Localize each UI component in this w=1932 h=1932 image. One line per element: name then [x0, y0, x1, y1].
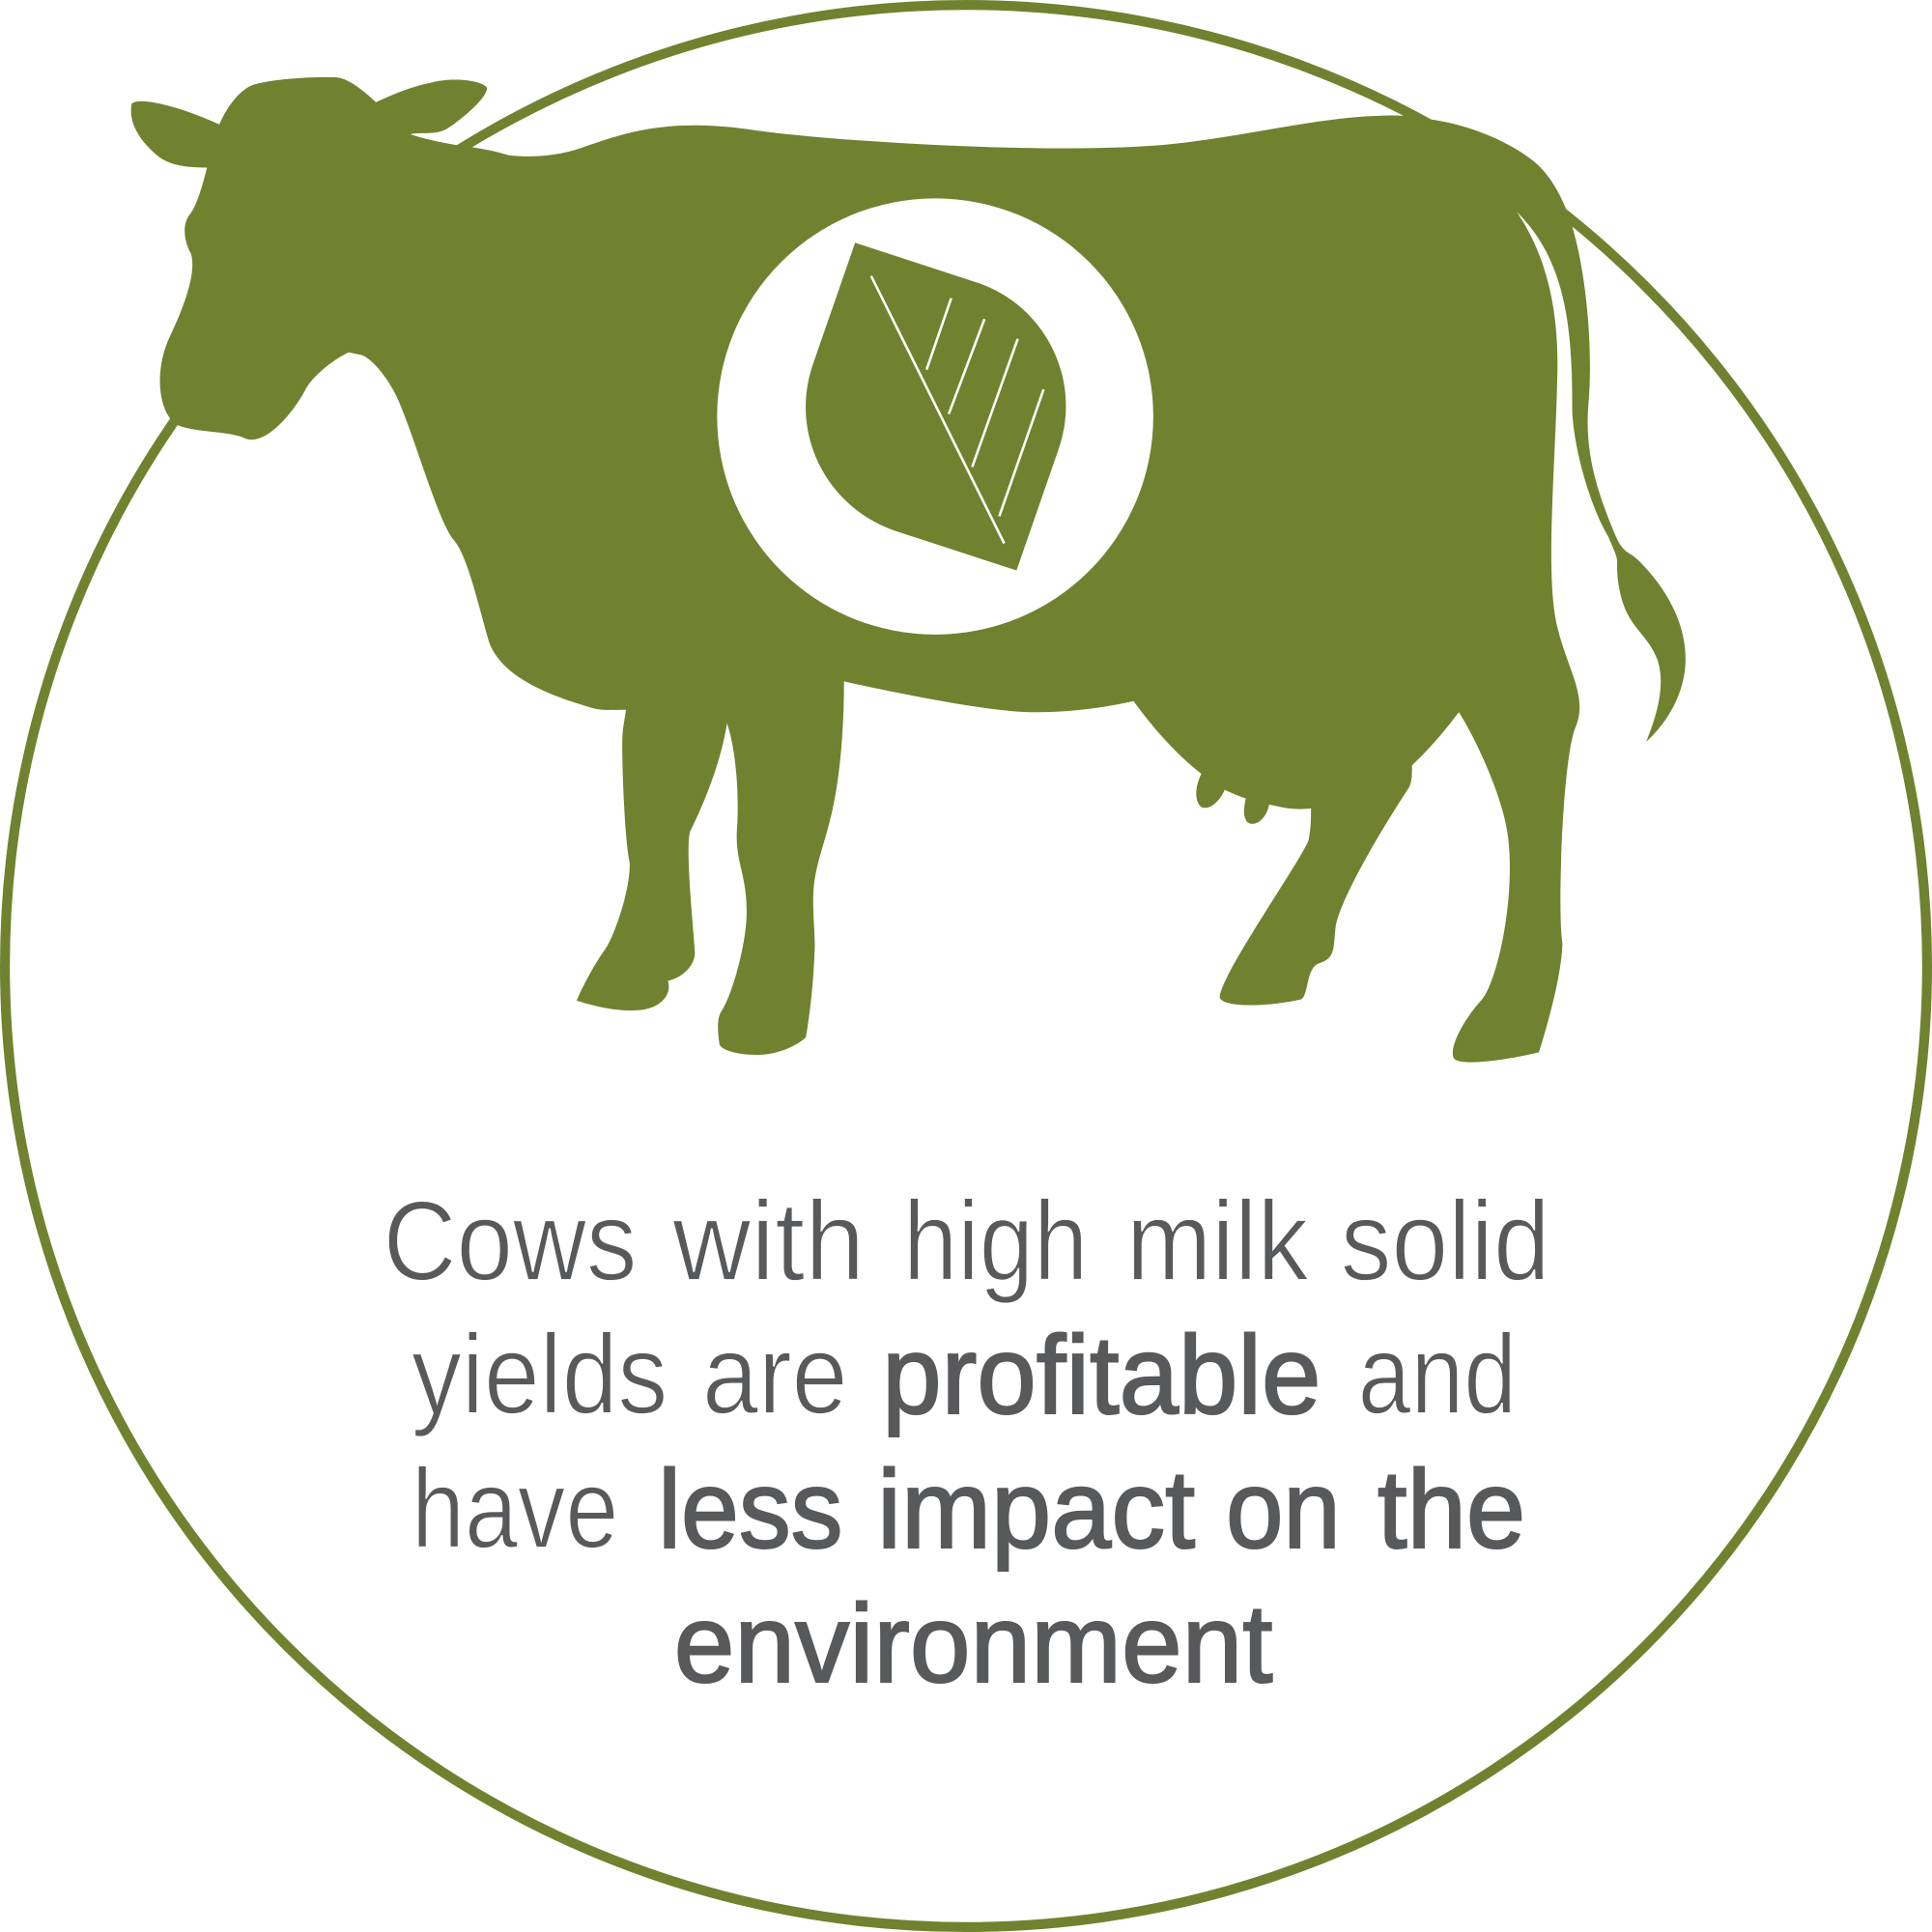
- text block: main message: solid: [1341, 1178, 1550, 1304]
- text block: main message: the: [1378, 1448, 1525, 1572]
- text block: main message: Cows: [384, 1178, 637, 1304]
- cow silhouette: [131, 77, 1686, 1063]
- text block: main message: yields: [412, 1311, 668, 1437]
- text block: main message: have: [412, 1445, 618, 1572]
- text block: main message: milk: [1126, 1178, 1309, 1304]
- text block: main message: less: [658, 1448, 842, 1572]
- text block: main message: on: [1226, 1448, 1341, 1572]
- text block: main message: environment: [674, 1582, 1273, 1706]
- text block: main message: are: [702, 1311, 848, 1437]
- text block: main message: and: [1358, 1311, 1517, 1437]
- icon: leaf: [806, 242, 1065, 571]
- text block: main message: with: [671, 1178, 865, 1304]
- text block: main message: high: [903, 1178, 1088, 1304]
- text block: main message: impact: [877, 1448, 1195, 1572]
- text block: main message: profitable: [882, 1314, 1321, 1437]
- text block: main message: [384, 1178, 1550, 1706]
- white circle badge: [717, 198, 1153, 635]
